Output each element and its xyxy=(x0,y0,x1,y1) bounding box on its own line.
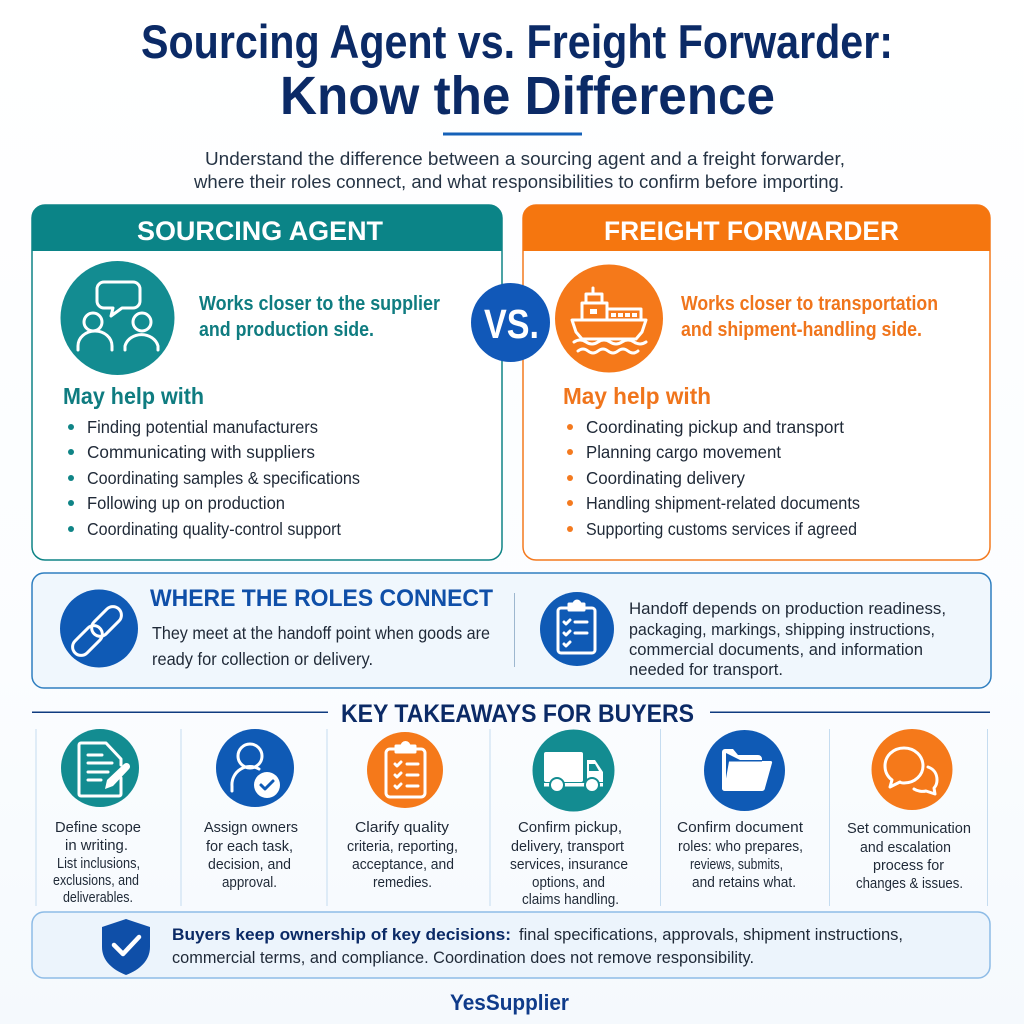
statement text: commercial terms, and compliance. Coordination does not remove responsibility. xyxy=(172,949,754,967)
icon: folder xyxy=(704,730,785,811)
handoff requirements text xyxy=(629,599,946,679)
text xyxy=(204,819,298,891)
text: approval. xyxy=(222,874,277,891)
icon: shield with check xyxy=(102,919,150,975)
brand: YesSupplier xyxy=(450,990,569,1015)
panel: freight forwarder xyxy=(523,205,990,560)
statement text: final specifications, approvals, shipment instructions, xyxy=(519,926,903,944)
role description: and production side. xyxy=(199,319,374,341)
list: Finding potential manufacturers xyxy=(87,417,318,437)
icon: cargo ship xyxy=(555,264,663,372)
text: Confirm pickup, xyxy=(518,819,622,836)
takeaway: assign owners xyxy=(204,729,298,891)
heading: key takeaways: KEY TAKEAWAYS FOR BUYERS xyxy=(341,700,694,728)
subtitle: where their roles connect, and what responsibilities to confirm before importing. xyxy=(193,171,844,192)
text: deliverables. xyxy=(63,889,133,906)
title xyxy=(141,15,893,126)
text: Set communication xyxy=(847,820,971,837)
text: decision, and xyxy=(208,856,291,873)
list: Coordinating quality-control support xyxy=(87,519,341,539)
subheading: May help with xyxy=(563,383,711,409)
takeaway: set communication xyxy=(847,729,971,892)
text xyxy=(53,819,141,906)
statement text: Buyers keep ownership of key decisions: xyxy=(172,926,511,944)
text: acceptance, and xyxy=(352,856,454,873)
role description: Works closer to the supplier xyxy=(199,293,440,315)
text xyxy=(510,819,628,908)
icon: document and pen xyxy=(61,729,139,807)
list: Following up on production xyxy=(87,493,285,513)
list: Handling shipment-related documents xyxy=(586,493,860,513)
subtitle: Understand the difference between a sourcing agent and a freight forwarder, xyxy=(205,148,845,169)
text: exclusions, and xyxy=(53,872,139,889)
text: in writing. xyxy=(65,837,128,854)
statement text xyxy=(172,926,903,967)
role description xyxy=(681,293,938,341)
heading: sourcing agent: SOURCING AGENT xyxy=(137,216,383,246)
list: Supporting customs services if agreed xyxy=(586,519,857,539)
takeaway: confirm documents xyxy=(677,730,804,891)
handoff requirements text: commercial documents, and information xyxy=(629,640,923,659)
title: Know the Difference xyxy=(280,66,775,126)
subheading: May help with xyxy=(63,383,204,409)
panel: buyer ownership xyxy=(32,912,990,978)
handoff requirements text: needed for transport. xyxy=(629,660,783,679)
handoff point text xyxy=(152,623,490,669)
takeaway: define scope xyxy=(53,729,141,906)
role description: and shipment-handling side. xyxy=(681,319,922,341)
text: reviews, submits, xyxy=(690,856,783,873)
text: remedies. xyxy=(373,874,432,891)
text: List inclusions, xyxy=(57,855,140,872)
icon: orange clipboard xyxy=(367,732,443,808)
icon: truck xyxy=(532,730,614,812)
panel: where the roles connect xyxy=(32,573,991,688)
text: Confirm document xyxy=(677,819,804,836)
list xyxy=(567,417,860,539)
text: delivery, transport xyxy=(511,838,625,855)
list: Coordinating samples & specifications xyxy=(87,468,360,488)
text: Define scope xyxy=(55,819,141,836)
VS badge xyxy=(471,283,550,362)
heading: WHERE THE ROLES CONNECT xyxy=(150,585,493,612)
role description: Works closer to transportation xyxy=(681,293,938,315)
takeaway: confirm pickup xyxy=(510,730,628,908)
text: claims handling. xyxy=(522,891,619,908)
text: criteria, reporting, xyxy=(347,838,458,855)
text xyxy=(677,819,804,891)
text: and retains what. xyxy=(692,874,796,891)
heading: freight forwarder: FREIGHT FORWARDER xyxy=(604,216,899,246)
icon: chain link xyxy=(60,590,138,668)
list xyxy=(68,417,360,539)
icon: person with check xyxy=(216,729,294,807)
icon: clipboard xyxy=(540,592,614,666)
list: Coordinating delivery xyxy=(586,468,745,488)
text: options, and xyxy=(532,874,605,891)
text: process for xyxy=(873,857,944,874)
text: Clarify quality xyxy=(355,819,450,836)
subtitle xyxy=(193,148,845,192)
VS badge: VS. xyxy=(484,301,539,347)
text xyxy=(847,820,971,892)
handoff point text: They meet at the handoff point when goods are xyxy=(152,623,490,643)
title: Sourcing Agent vs. Freight Forwarder: xyxy=(141,15,893,68)
role description xyxy=(199,293,440,341)
panel: sourcing agent xyxy=(32,205,502,560)
list: Communicating with suppliers xyxy=(87,442,315,462)
handoff point text: ready for collection or delivery. xyxy=(152,649,373,669)
text: services, insurance xyxy=(510,856,628,873)
icon: people talking xyxy=(60,261,174,375)
handoff requirements text: packaging, markings, shipping instructions, xyxy=(629,620,935,639)
list: Coordinating pickup and transport xyxy=(586,417,844,437)
icon: speech bubbles xyxy=(872,729,952,810)
list: Planning cargo movement xyxy=(586,442,781,462)
handoff requirements text: Handoff depends on production readiness, xyxy=(629,599,946,618)
text: Assign owners xyxy=(204,819,298,836)
text: roles: who prepares, xyxy=(678,838,803,855)
text xyxy=(347,819,458,891)
text: and escalation xyxy=(860,839,951,856)
takeaway: clarify quality xyxy=(347,732,458,891)
text: for each task, xyxy=(206,838,293,855)
text: changes & issues. xyxy=(856,875,963,892)
